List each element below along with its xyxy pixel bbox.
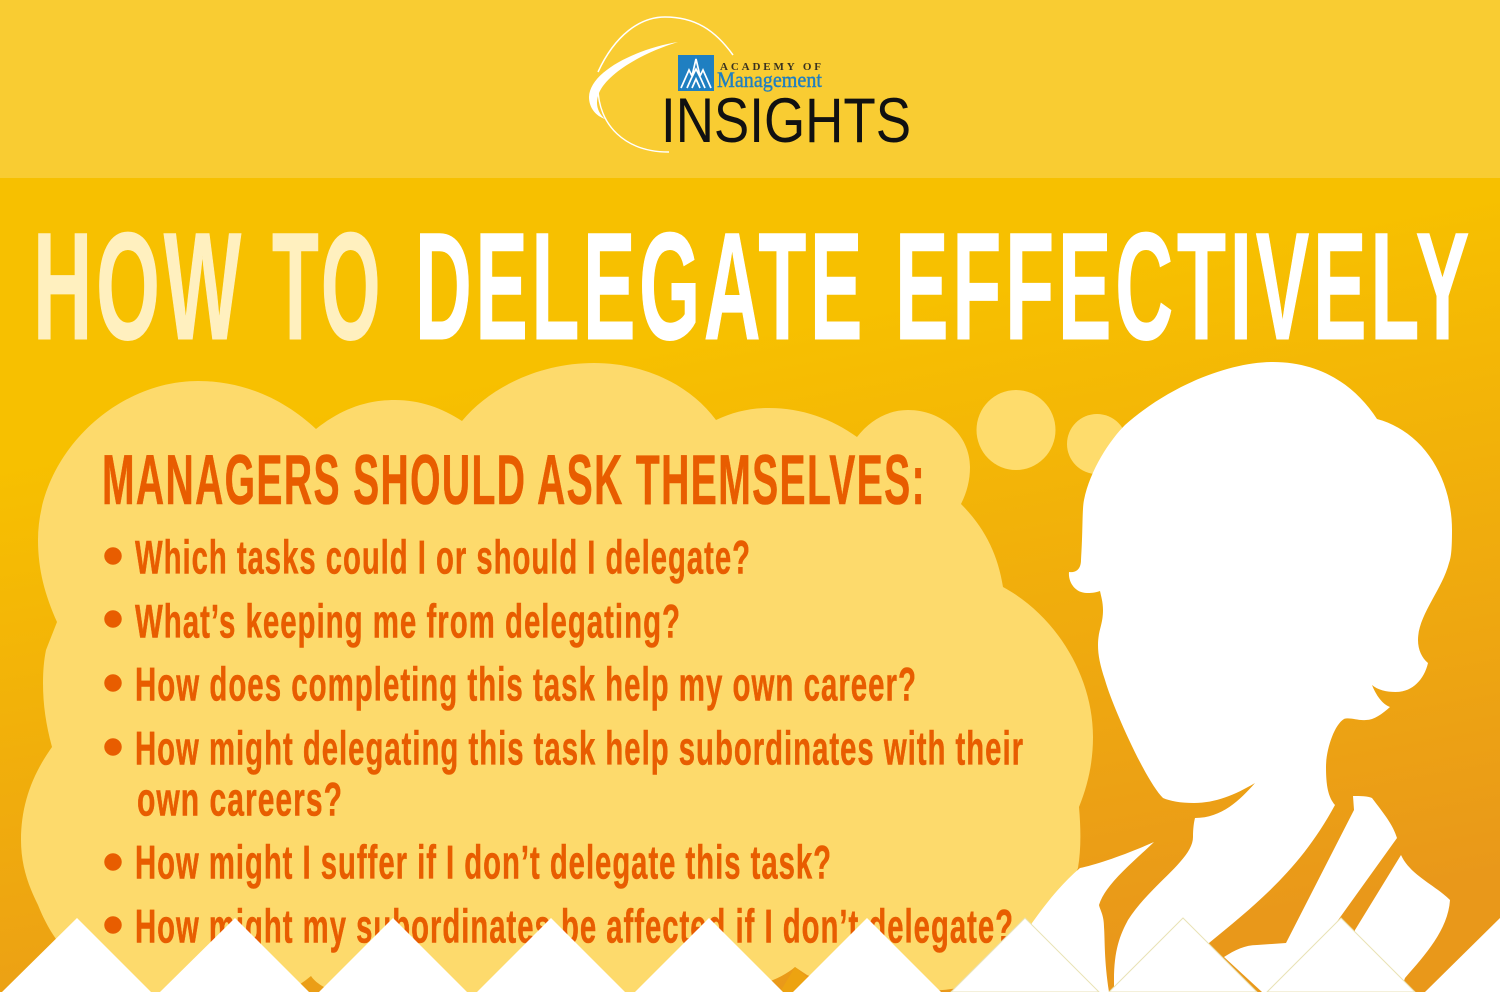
silhouette: left collar xyxy=(1010,842,1154,992)
logo: Insights: INSIGHTS xyxy=(661,86,911,156)
silhouette: head and neck xyxy=(1069,362,1452,992)
manager silhouette xyxy=(1010,362,1452,992)
thought bubble: small dot xyxy=(1067,414,1127,474)
orange notch at cloud base xyxy=(780,967,810,992)
logo: Management: Management xyxy=(717,67,822,92)
question 3: How does completing this task help my own career? xyxy=(135,658,917,712)
white torn-paper teeth xyxy=(0,918,1500,1000)
thought bubble: large dot xyxy=(976,390,1056,470)
question 2: What’s keeping me from delegating? xyxy=(135,596,681,648)
question 1 xyxy=(104,532,751,584)
question 3 xyxy=(104,658,917,712)
logo: Academy of: ACADEMY OF xyxy=(720,61,821,73)
question 5 xyxy=(104,836,832,890)
title: DELEGATE xyxy=(415,201,866,372)
question 1: Which tasks could I or should I delegate? xyxy=(135,532,751,584)
thought bubble cloud xyxy=(21,363,1093,992)
title: TO xyxy=(272,201,384,372)
silhouette: right collar xyxy=(1224,796,1397,992)
logo: white orbit arcs xyxy=(589,17,733,152)
header band with logo xyxy=(0,0,1500,178)
title: HOW xyxy=(33,201,245,372)
question 6 xyxy=(104,900,1014,954)
question 4: own careers? xyxy=(137,774,343,826)
logo: blue mountain mark xyxy=(678,55,714,91)
question 5: How might I suffer if I don’t delegate this task? xyxy=(135,836,832,890)
question 4 xyxy=(104,722,1024,826)
silhouette: lapel xyxy=(1340,855,1450,992)
question 2 xyxy=(104,596,681,648)
question list xyxy=(104,532,1024,954)
title xyxy=(33,201,1473,372)
